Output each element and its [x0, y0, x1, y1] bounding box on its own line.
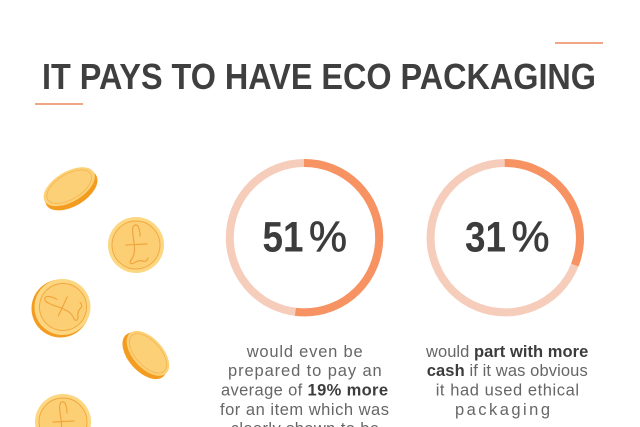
text block: 51% description: [220, 343, 389, 427]
text block: 51% description: would even be: [246, 343, 363, 361]
text block: 31% description: cash if it was obvious: [427, 362, 588, 380]
chart: 51% ring: [230, 163, 379, 312]
text block: 31% description: packaging: [455, 401, 550, 419]
chart: 31% ring: %: [512, 214, 550, 262]
text block: 31% description: would part with more: [425, 343, 588, 361]
decorative line: bottom left: [35, 103, 83, 105]
decorative line: top right: [555, 42, 603, 44]
title: IT PAYS TO HAVE ECO PACKAGING: [42, 56, 596, 97]
icon: rotated pound coin left: [32, 279, 90, 338]
chart: 31% ring: [431, 163, 580, 312]
icon: pound coin upper right: [108, 217, 164, 273]
icon: tilted coin top: [37, 159, 104, 219]
text block: 31% description: it had used ethical: [436, 382, 579, 400]
text block: 51% description: prepared to pay an: [228, 362, 382, 380]
text block: 51% description: for an item which was: [220, 401, 389, 419]
icon: tilted coin right: [114, 322, 177, 387]
chart: 51% ring: 51: [262, 214, 304, 262]
chart: 51% ring: %: [309, 214, 347, 262]
text block: 51% description: average of 19% more: [221, 382, 388, 400]
chart: 31% ring: 31: [465, 214, 506, 262]
text block: 31% description: [425, 343, 588, 419]
icon: pound coin bottom: [35, 394, 91, 427]
